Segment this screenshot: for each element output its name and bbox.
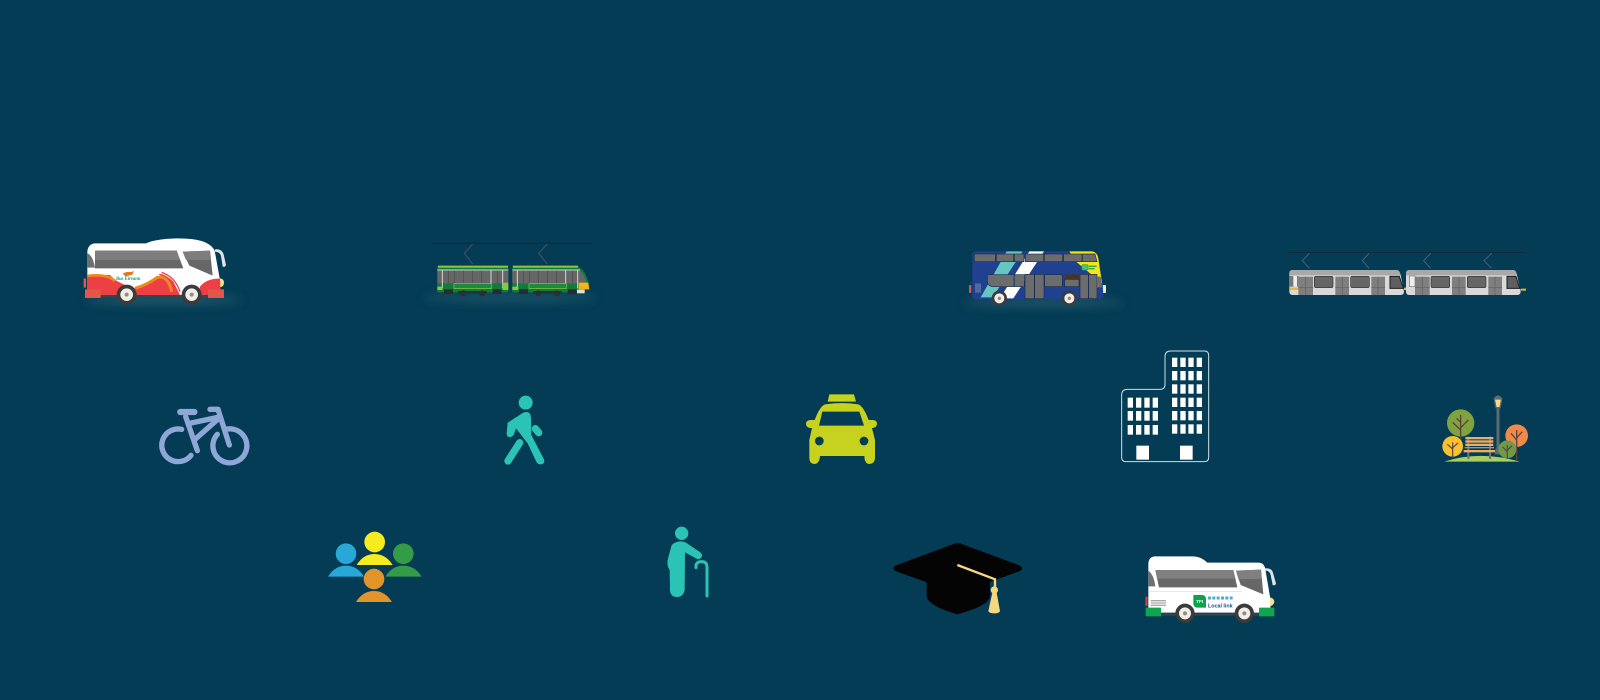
wheel: rear — [117, 285, 137, 305]
tree: large green — [1447, 409, 1474, 453]
wheel: front — [1235, 604, 1254, 623]
tree: orange — [1505, 424, 1528, 461]
icon: park with bench, lamp and trees — [1442, 395, 1528, 462]
logo: TFI Local Link: TFI — [1196, 599, 1203, 604]
park bench — [1464, 437, 1495, 459]
tram car: rear — [1289, 270, 1415, 295]
icon: group of people — [328, 532, 422, 602]
icon: bicycle — [162, 409, 247, 463]
person: green — [385, 543, 422, 577]
wheel: rear — [1175, 604, 1195, 623]
person: blue — [328, 543, 364, 577]
windows and doors: lower deck — [987, 274, 1097, 299]
logo: TFI Local Link — [1193, 595, 1233, 609]
icon: pedestrian — [507, 396, 544, 464]
tram car: front — [1406, 270, 1526, 295]
wheel: front — [182, 285, 202, 305]
tree: small green — [1498, 440, 1516, 459]
person: orange — [356, 569, 392, 602]
windows: upper deck — [974, 254, 1097, 262]
icon: TFI Local Link coach — [1145, 556, 1276, 623]
tram car: rear — [437, 266, 508, 296]
icon: green Luas tram — [423, 243, 597, 302]
icon: older person with cane — [667, 527, 707, 597]
wheel: front — [1062, 291, 1077, 306]
logo: bus operator badge — [1082, 265, 1097, 270]
person: yellow — [357, 532, 393, 565]
street lamp — [1493, 395, 1503, 454]
icon: grey light-rail tram — [1288, 252, 1526, 295]
wheel: rear — [992, 291, 1007, 306]
icon: graduation cap — [893, 543, 1022, 614]
tassel — [957, 565, 1000, 613]
icon: office building — [1122, 351, 1209, 462]
icon: taxi — [806, 394, 877, 464]
tram car: front — [512, 266, 589, 296]
logo: TFI Local Link: Local link — [1208, 603, 1233, 609]
icon: double-decker bus — [963, 251, 1123, 307]
icon: Bus Éireann coach — [84, 238, 242, 305]
logo: Bus Éireann wordmark — [115, 271, 141, 282]
tree: yellow — [1442, 436, 1463, 458]
logo: Bus Éireann wordmark: Bus Éireann — [115, 276, 141, 282]
